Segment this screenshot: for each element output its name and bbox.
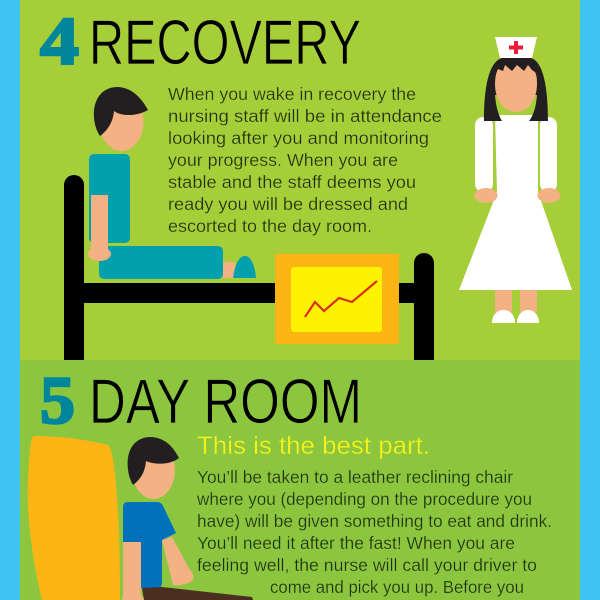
text block: day room description [196, 467, 552, 597]
heading: day room: DAY ROOM [89, 367, 362, 437]
left blue border [0, 0, 20, 600]
number 4: 4 [40, 3, 79, 79]
panel: day room background [20, 360, 580, 600]
text block: day room description: come and pick you up. Before you [270, 577, 524, 597]
icon: nurse [459, 37, 572, 323]
text block: day room description: where you (depending on the procedure you [196, 489, 532, 509]
heading: recovery: RECOVERY [89, 8, 361, 78]
text block: recovery description [168, 84, 442, 236]
icon: reclining chair [28, 436, 120, 600]
number 5: 5 [40, 362, 75, 438]
right blue border [580, 0, 600, 600]
text block: recovery description: ready you will be dressed and [168, 194, 408, 214]
text block: recovery description: When you wake in recovery the [168, 84, 416, 104]
text block: recovery description: looking after you and monitoring [168, 128, 429, 148]
text block: day room description: You’ll be taken to a leather reclining chair [197, 467, 513, 487]
panel: recovery background [20, 0, 580, 360]
text block: recovery description: escorted to the day room. [168, 216, 372, 236]
text block: recovery description: stable and the staff deems you [168, 172, 416, 192]
text block: day room description: You’ll need it after the fast! When you are [197, 533, 515, 553]
text block: recovery description: your progress. When you are [168, 150, 398, 170]
icon: patient sitting in bed [88, 87, 256, 279]
icon: hospital bed [64, 175, 434, 360]
icon: heart monitor [275, 254, 399, 344]
icon: patient in chair [122, 437, 253, 600]
text block: day room description: have) will be given something to eat and drink. [197, 511, 552, 531]
subheading: best part: This is the best part. [197, 432, 430, 460]
text block: day room description: feeling well, the nurse will call your driver to [197, 555, 537, 575]
text block: recovery description: nursing staff will be in attendance [168, 106, 442, 126]
